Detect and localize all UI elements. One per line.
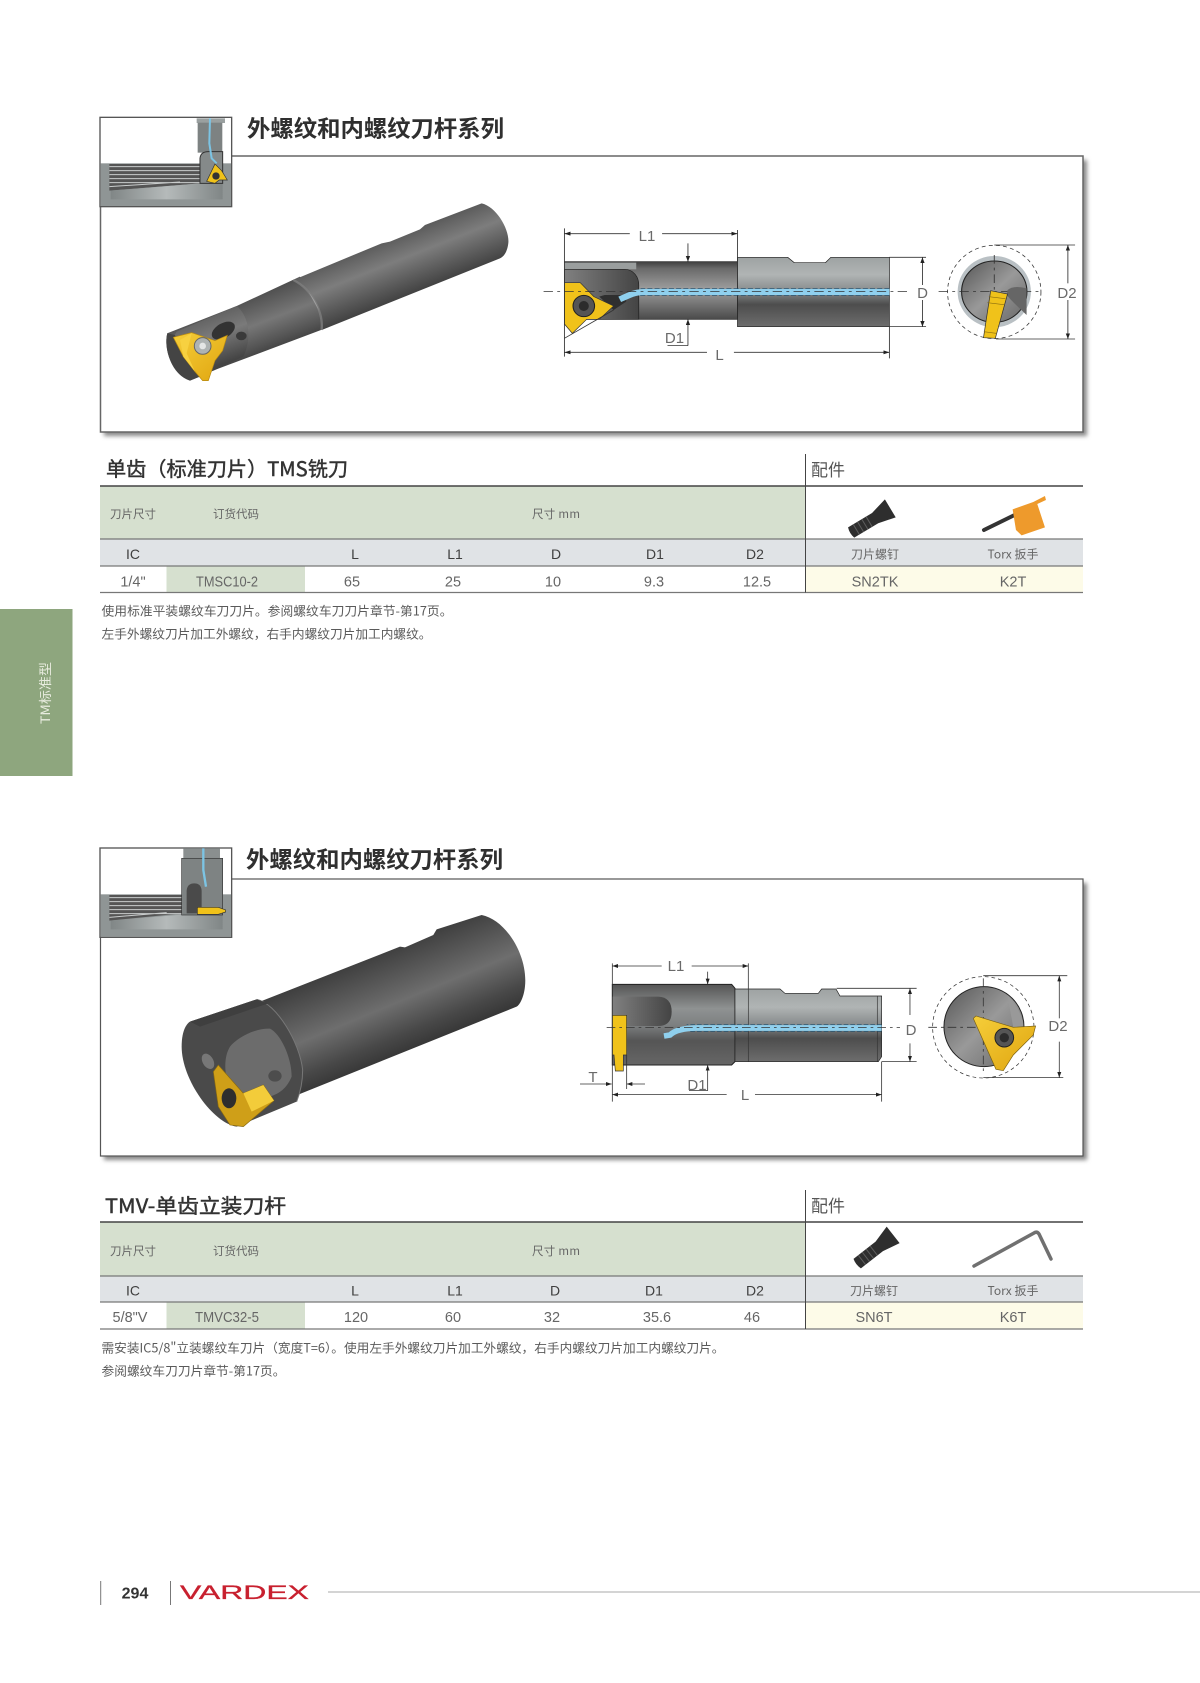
data row: K6T	[1000, 1310, 1026, 1326]
data row	[113, 1302, 1083, 1329]
icon: torx hex key	[974, 1232, 1051, 1266]
data row: 60	[445, 1310, 461, 1326]
table heading: 单齿（标准刀片）TMS铣刀	[106, 453, 348, 482]
column header row: IC	[126, 1282, 140, 1298]
column header row: D2	[746, 1282, 764, 1298]
dimension labels: D2	[1048, 1018, 1068, 1035]
dimension labels: T	[588, 1069, 598, 1086]
illustration: 3D view of TMS tool	[166, 203, 508, 381]
column header row: D1	[646, 546, 664, 562]
notes: TMV table: 参阅螺纹车刀刀片章节-第17页。	[102, 1360, 286, 1380]
column header row: Torx 扳手	[988, 1282, 1038, 1299]
column header row	[100, 1276, 1083, 1302]
heading: series title: 外螺纹和内螺纹刀杆系列	[246, 840, 503, 874]
icon: torx wrench	[984, 496, 1046, 535]
data row: TMVC32-5	[195, 1310, 259, 1326]
table heading: TMV-单齿立装刀杆	[105, 1190, 286, 1219]
dimension labels	[588, 958, 1068, 1104]
header band: 刀片尺寸	[110, 506, 156, 522]
icon: insert screw	[845, 499, 896, 542]
dimension labels: D	[917, 285, 928, 302]
column header row	[100, 539, 1083, 566]
dimension labels: L	[741, 1087, 749, 1104]
sidebar tab: TM标准型: TM标准型	[35, 662, 54, 724]
column header row: 刀片螺钉	[851, 546, 899, 562]
data row: 5/8"V	[113, 1310, 148, 1326]
column header row: Torx 扳手	[988, 546, 1038, 562]
column header row: IC	[126, 546, 140, 562]
schematic: side view with dimensions	[580, 963, 1067, 1102]
icon: insert screw	[850, 1227, 900, 1272]
data row: 46	[744, 1310, 760, 1326]
data row	[120, 566, 1083, 592]
column header row: L1	[447, 546, 463, 562]
panel: TMV tool holder series	[100, 840, 1087, 1160]
column header row: D2	[746, 546, 764, 562]
header band: 尺寸 mm	[532, 506, 580, 522]
data row: K2T	[1000, 574, 1026, 590]
dimension labels: D1	[665, 330, 684, 347]
notes: TMV table: 需安装IC5/8"立装螺纹车刀片（宽度T=6）。使用左手外螺纹刀片加工外螺纹，右手内螺纹刀片加工内螺纹刀片。	[102, 1338, 724, 1356]
notes: TMS table: 左手外螺纹刀片加工外螺纹，右手内螺纹刀片加工内螺纹。	[102, 624, 432, 642]
data row: 12.5	[743, 574, 771, 590]
schematic: side view with dimensions	[544, 228, 1075, 358]
notes: TMV table	[102, 1338, 724, 1380]
data row: 32	[544, 1310, 560, 1326]
dimension labels: D2	[1057, 285, 1077, 302]
data row: 65	[344, 574, 360, 590]
panel: TMS tool holder series	[100, 110, 1087, 436]
dimension labels: L1	[639, 228, 655, 245]
column header row: L1	[447, 1282, 463, 1298]
notes: TMS table	[102, 600, 452, 642]
header band: 订货代码	[213, 1243, 259, 1259]
data row: SN6T	[855, 1310, 893, 1326]
data row: 35.6	[643, 1310, 671, 1326]
column header row: L	[351, 1282, 359, 1298]
header band	[100, 486, 806, 539]
inset: laydown threading illustration	[100, 848, 232, 937]
sidebar tab: TM标准型	[0, 609, 72, 776]
data row: 1/4"	[120, 574, 146, 590]
accessories heading: 配件	[811, 1192, 845, 1217]
table: TMS single tooth	[100, 453, 1083, 592]
header band: 订货代码	[213, 506, 259, 522]
dimension labels: L	[715, 347, 724, 364]
data row: SN2TK	[852, 574, 899, 590]
data row: TMSC10-2	[196, 574, 258, 590]
column header row: D1	[645, 1282, 663, 1298]
logo: VARDEX: VARDEX	[180, 1583, 310, 1604]
data row: 120	[344, 1310, 368, 1326]
column header row: D	[551, 546, 561, 562]
dimension labels: D	[906, 1022, 917, 1039]
data row: 25	[445, 574, 461, 590]
header band: 尺寸 mm	[532, 1243, 580, 1259]
column header row: L	[351, 546, 359, 562]
page number: 294	[122, 1586, 148, 1602]
inset: internal threading illustration	[100, 117, 232, 207]
notes: TMS table: 使用标准平装螺纹车刀刀片。参阅螺纹车刀刀片章节-第17页。	[102, 600, 452, 620]
table: TMV single tooth	[100, 1190, 1083, 1329]
footer: page number and logo	[101, 1581, 1200, 1605]
data row: 9.3	[644, 574, 664, 590]
column header row: 刀片螺钉	[850, 1282, 898, 1299]
column header row: D	[550, 1282, 560, 1298]
header band: 刀片尺寸	[110, 1243, 156, 1259]
header band	[100, 1222, 806, 1276]
dimension labels: D1	[687, 1077, 707, 1094]
accessories heading: 配件	[811, 456, 845, 481]
heading: series title: 外螺纹和内螺纹刀杆系列	[247, 110, 504, 144]
illustration: 3D view of TMV tool	[182, 915, 525, 1127]
data row: 10	[545, 574, 561, 590]
dimension labels	[639, 228, 1077, 364]
dimension labels: L1	[668, 958, 684, 975]
